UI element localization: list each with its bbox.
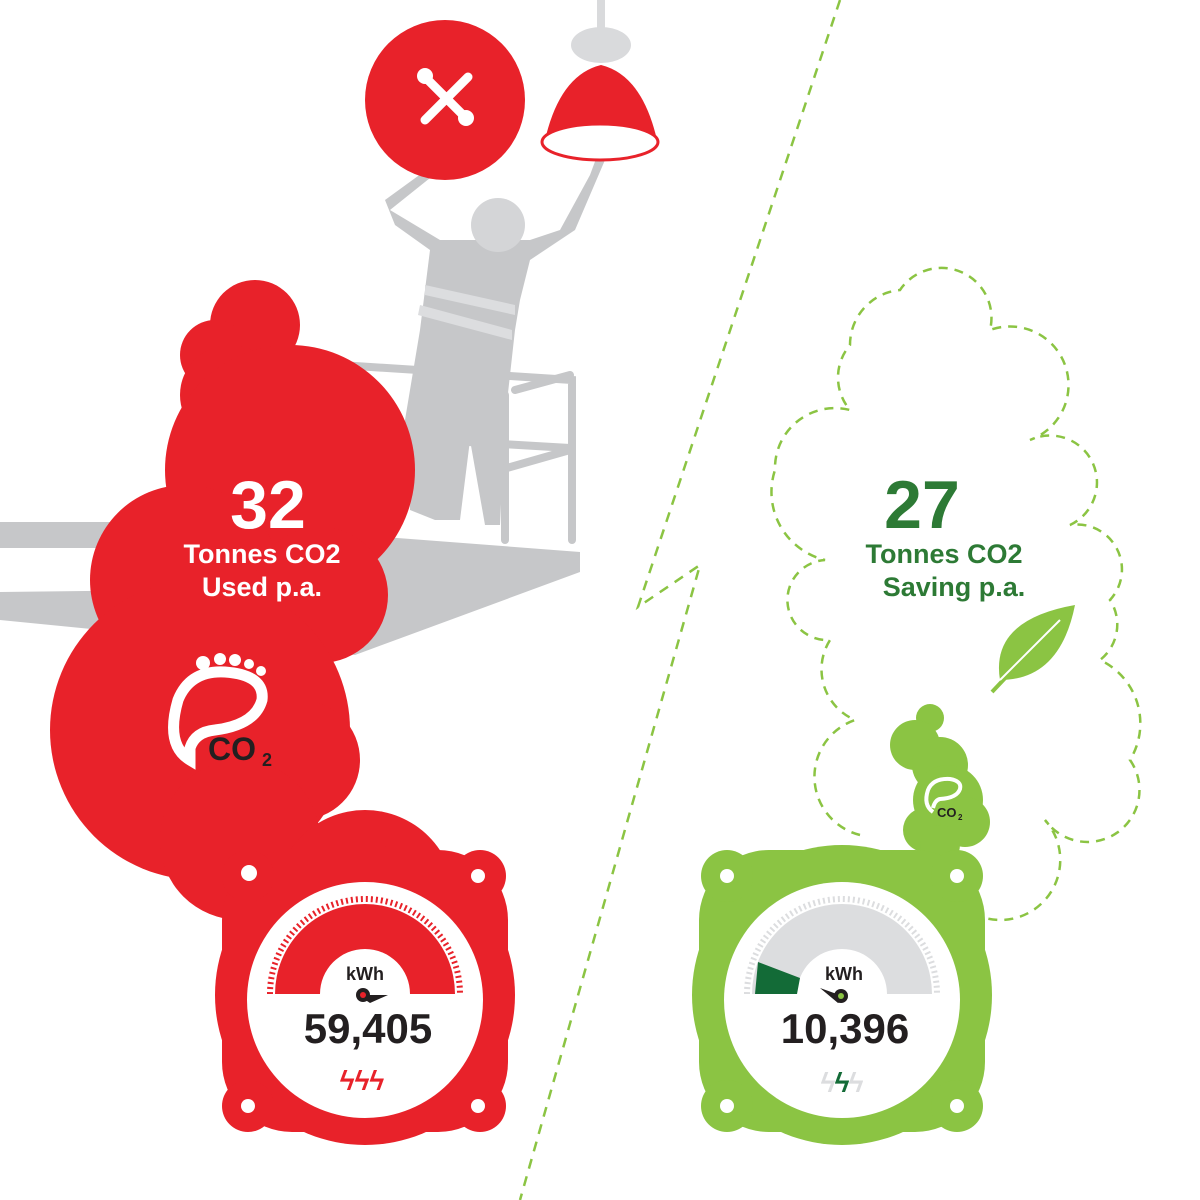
heading: 32: 32: [230, 467, 306, 543]
vest stripes: [418, 285, 515, 340]
green small cloud with CO2: CO: [937, 805, 956, 820]
icon: tools circle: [365, 20, 525, 180]
value: 59,405: 59,405: [304, 1005, 432, 1052]
icon: bolts green: ϟ: [821, 1067, 836, 1098]
platform and worker: [0, 145, 610, 655]
icon: CO2 footprint red: 2: [262, 750, 272, 770]
worker: [385, 145, 610, 525]
icon: bolts green: ϟ: [849, 1067, 864, 1098]
platform: [0, 522, 580, 655]
red meter: [215, 845, 515, 1145]
icon: leaf: [992, 605, 1075, 692]
green dashed cloud: [771, 268, 1140, 920]
red CO2 cloud: [50, 280, 455, 990]
green meter: [692, 845, 992, 1145]
head: [471, 198, 525, 252]
value: 10,396: 10,396: [781, 1005, 909, 1052]
green small cloud with CO2: [890, 704, 990, 865]
icon: bolts green: ϟ: [835, 1067, 850, 1098]
label: Tonnes CO2 Saving: Tonnes CO2: [865, 539, 1023, 569]
icon: bolts red: ϟϟϟ: [340, 1065, 384, 1096]
lamp: [542, 0, 658, 160]
red CO2 cloud: Used p.a.: [202, 572, 322, 602]
green dashed cloud: Saving p.a.: [883, 572, 1025, 602]
green meter: kWh: [825, 964, 863, 984]
red meter: kWh: [346, 964, 384, 984]
icon: CO2 footprint red: [174, 653, 272, 770]
green small cloud with CO2: 2: [958, 813, 963, 822]
icon: bolts green: [821, 1067, 864, 1098]
icon: CO2 footprint red: CO: [208, 731, 256, 767]
railing: [340, 365, 572, 540]
label: Tonnes CO2 Used: Tonnes CO2: [183, 539, 341, 569]
heading: 27: 27: [884, 467, 960, 543]
divider dashed line: [520, 0, 840, 1200]
